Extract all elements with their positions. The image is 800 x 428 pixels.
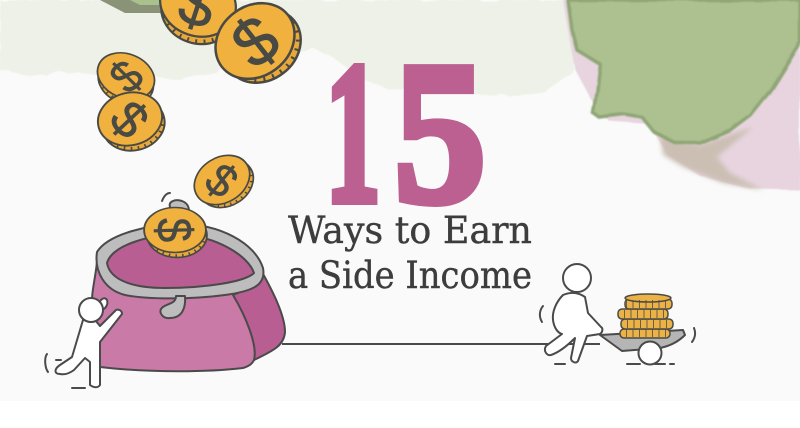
- coin stack: [618, 294, 673, 338]
- subtitle: a Side Income: [288, 254, 532, 297]
- title number 15: 5: [394, 20, 486, 245]
- coin: left upper: $: [100, 51, 154, 103]
- title number 15: [325, 20, 486, 245]
- watercolor blob: pink: [563, 0, 800, 190]
- ground line: [282, 343, 600, 345]
- watercolor patch: dark green top: [100, 0, 162, 13]
- wheelbarrow: [600, 328, 695, 364]
- watercolor blob: green: [568, 0, 800, 143]
- subtitle: Ways to Earn: [288, 209, 532, 252]
- coin: above purse: [185, 145, 262, 219]
- coin: left lower: $: [99, 90, 160, 149]
- purse frame: [97, 224, 263, 298]
- watercolor band: pale green: [0, 0, 590, 96]
- coin: in purse: [144, 208, 207, 257]
- subtitle: [288, 209, 532, 297]
- purse top clasp: [170, 200, 189, 212]
- purse opening: [107, 235, 254, 288]
- coin: left upper: [89, 45, 162, 112]
- purse clasp: [160, 296, 185, 318]
- title number 15: 1: [325, 20, 381, 245]
- purse side panel: [233, 272, 285, 360]
- purse: [92, 193, 285, 371]
- figure pushing wheelbarrow: [540, 264, 602, 364]
- coin: in purse: $: [146, 217, 203, 243]
- coin: top centre: [149, 0, 246, 53]
- coin: top right: $: [218, 1, 294, 83]
- coin: top right: [200, 0, 315, 101]
- watercolor blob: brown shading: [660, 127, 763, 190]
- purse body: [92, 262, 255, 371]
- figure pushing purse: [45, 297, 122, 388]
- coin: left lower: [92, 85, 170, 158]
- coin: above purse: $: [195, 153, 248, 208]
